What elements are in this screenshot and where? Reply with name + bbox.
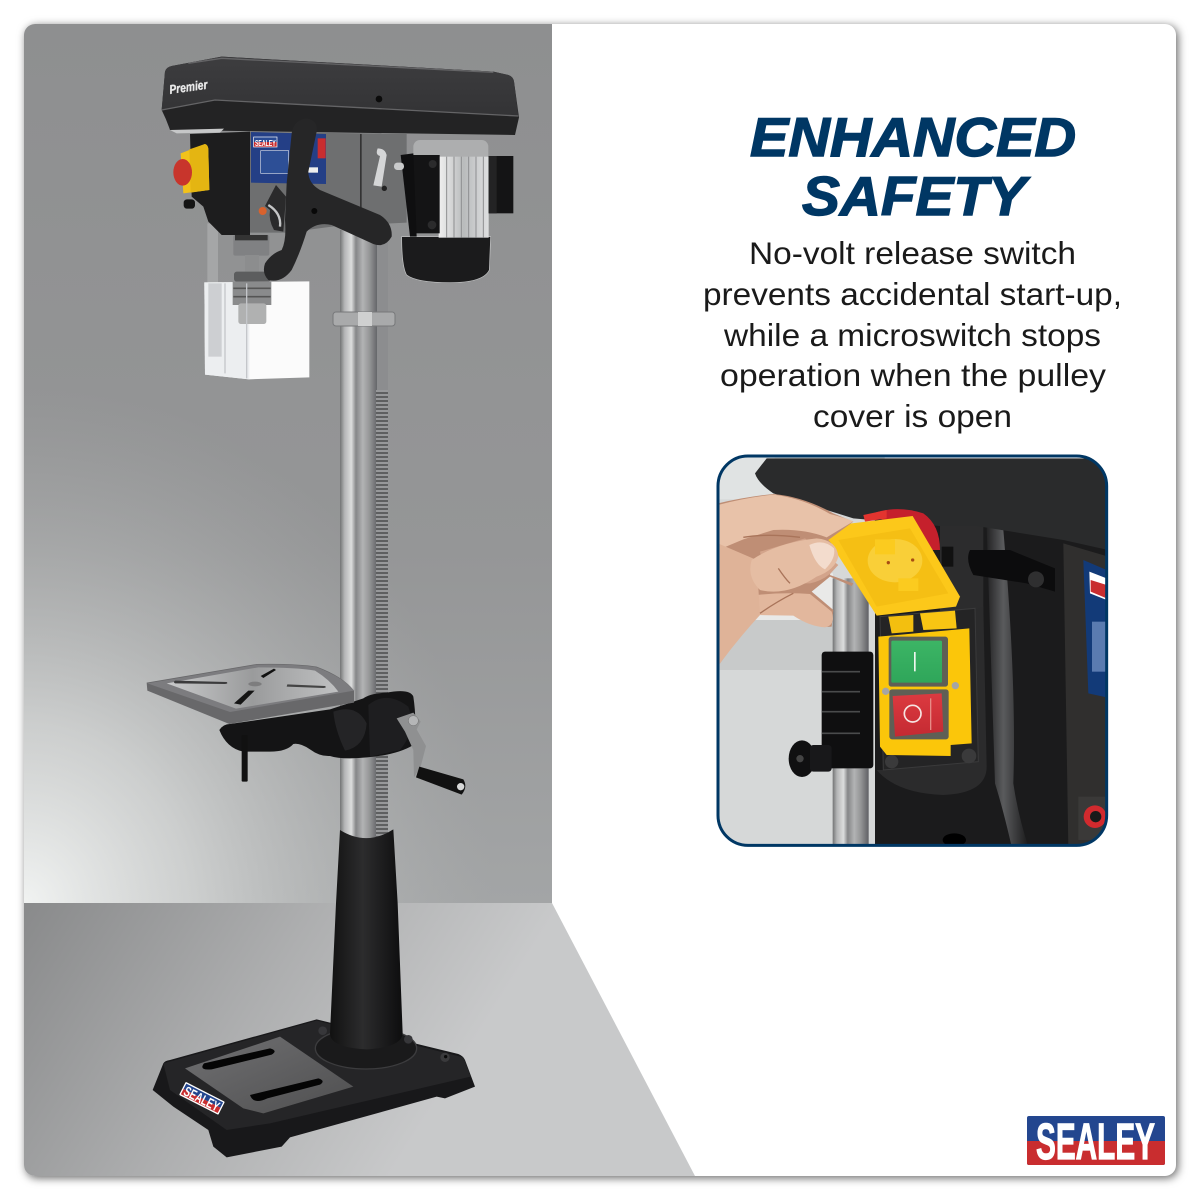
- inset photo: no-volt release switch: [718, 456, 1108, 847]
- head casing: [190, 132, 407, 235]
- panel: studio backdrop: [24, 24, 695, 1176]
- head cover: Premier: [168, 78, 209, 97]
- canopy: [755, 458, 1108, 550]
- table: [147, 664, 354, 724]
- collar and locking knob: [789, 652, 873, 777]
- body text: No-volt release switch: [749, 235, 1076, 271]
- table support and crank: [219, 691, 465, 795]
- motor: [394, 140, 513, 283]
- sealey base badge: [179, 1082, 225, 1116]
- body text: [703, 235, 1122, 434]
- hand: [718, 494, 853, 663]
- depth stop rod: [207, 223, 218, 283]
- product: floor standing pillar drill: [147, 57, 519, 1157]
- safety switch: [173, 144, 209, 209]
- title: SAFETY: [802, 165, 1030, 227]
- feed handle: [264, 118, 392, 281]
- photo background: [718, 456, 885, 846]
- body text: operation when the pulley: [720, 357, 1106, 393]
- pedestal: [330, 829, 403, 1049]
- spindle and chuck: [233, 235, 271, 282]
- head casing: SEALEY: [255, 138, 276, 148]
- sealey base badge: SEALEY: [181, 1083, 223, 1115]
- body text: while a microswitch stops: [723, 317, 1101, 353]
- chrome column: [833, 578, 869, 847]
- base: [153, 1019, 475, 1157]
- inset frame: [718, 456, 1107, 845]
- title: [750, 106, 1076, 227]
- body text: prevents accidental start-up,: [703, 276, 1122, 312]
- red stop button: [863, 509, 940, 550]
- lower assembly: table, pedestal and base: [147, 664, 475, 1157]
- title: ENHANCED: [750, 106, 1076, 168]
- body text: cover is open: [813, 398, 1012, 434]
- yellow switch housing: [878, 611, 972, 756]
- head cover: [162, 57, 519, 135]
- column: [333, 230, 395, 840]
- drill head: [162, 57, 519, 379]
- yellow open lid: [828, 516, 960, 616]
- machine body: [875, 517, 1108, 847]
- chuck guard: [204, 281, 309, 379]
